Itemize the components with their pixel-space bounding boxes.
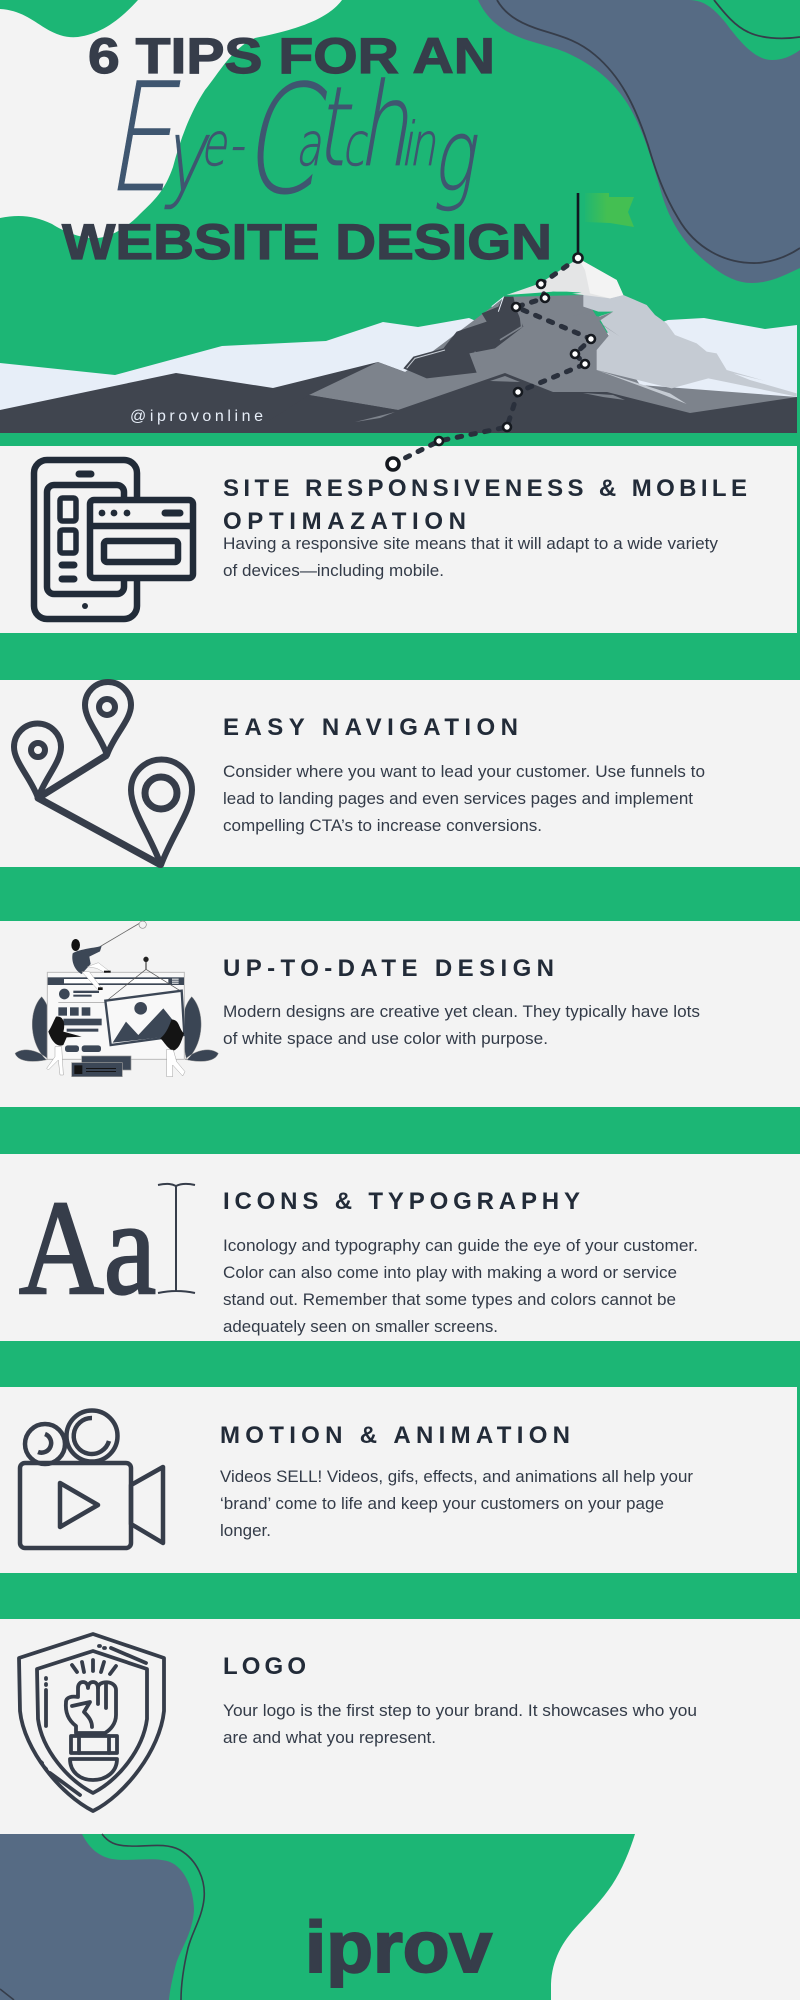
heading: UP-TO-DATE DESIGN — [223, 955, 554, 982]
body text: Modern designs are creative yet clean. They typically have lots — [223, 1003, 700, 1021]
footer logo: iprov — [305, 1908, 492, 1988]
heading: LOGO — [223, 1653, 306, 1680]
script title: e — [200, 111, 228, 180]
peak faces — [403, 258, 797, 404]
script title: i — [400, 111, 415, 180]
light right face — [583, 295, 797, 397]
person right — [160, 1019, 184, 1051]
header decorative line: top right corner — [714, 0, 800, 38]
crack lines on light face — [572, 310, 620, 352]
heading: ICONS & TYPOGRAPHY — [223, 1188, 580, 1215]
script title: n — [409, 111, 436, 180]
left face highlights — [407, 350, 445, 368]
lower snow streaks — [597, 370, 687, 404]
snow cap — [507, 258, 623, 298]
body text: of white space and use color with purpose. — [223, 1030, 548, 1048]
icon: web design illustration — [15, 921, 218, 1077]
trail: dashed path up the mountain — [387, 254, 595, 470]
footer: slate blob — [0, 1834, 194, 2000]
icon: summit flag — [578, 193, 634, 258]
front ridge glints — [355, 376, 625, 422]
body text: Color can also come into play with making a word or service — [223, 1264, 677, 1282]
heading: OPTIMAZATION — [223, 508, 466, 535]
cards — [82, 1056, 131, 1070]
icon: shield with fist — [19, 1634, 164, 1811]
snow cap highlight — [578, 258, 623, 298]
heading: MOTION & ANIMATION — [220, 1422, 570, 1449]
hook and ropes — [143, 957, 149, 962]
body text — [220, 1468, 694, 1540]
script title: y — [162, 98, 210, 214]
heading: SITE RESPONSIVENESS & MOBILE — [223, 475, 747, 502]
icon: responsive devices — [34, 460, 193, 619]
script title: g — [431, 98, 477, 214]
picture frame — [105, 991, 184, 1045]
title line 2: WEBSITE DESIGN — [62, 214, 552, 270]
body text: of devices—including mobile. — [223, 562, 444, 580]
panel: logo — [0, 1619, 800, 1834]
far snowy range — [0, 318, 797, 433]
body text: lead to landing pages and even services pages and implement — [223, 790, 693, 808]
leaves right — [182, 997, 218, 1061]
footer: light blob — [551, 1834, 800, 2000]
green glint — [552, 292, 582, 295]
body text: Your logo is the first step to your brand. It showcases who you — [223, 1702, 697, 1720]
body text — [223, 763, 705, 835]
mountain scene — [0, 258, 797, 433]
heading: EASY NAVIGATION — [223, 714, 518, 741]
body text: longer. — [220, 1522, 271, 1540]
icon: typography Aa with text cursor: Aa — [19, 1174, 156, 1323]
front dark ridge — [250, 373, 797, 433]
body text — [223, 1003, 700, 1048]
social handle: @iprovonline — [130, 408, 263, 425]
heading — [223, 475, 747, 535]
script title: h — [357, 60, 409, 193]
script title: t — [315, 64, 352, 192]
icon: video camera — [20, 1410, 163, 1548]
script title: E — [105, 51, 180, 226]
body text: compelling CTA’s to increase conversions. — [223, 817, 542, 835]
panel: motion and animation — [0, 1387, 797, 1573]
body text: ‘brand’ come to life and keep your customers on your page — [220, 1495, 664, 1513]
leaves left — [15, 997, 51, 1061]
body text: Iconology and typography can guide the eye of your customer. — [223, 1237, 698, 1255]
panel: up-to-date design — [0, 921, 800, 1107]
back dark ridge — [0, 362, 500, 433]
body text: Videos SELL! Videos, gifs, effects, and animations all help your — [220, 1468, 694, 1486]
body text: Having a responsive site means that it will adapt to a wide variety — [223, 535, 719, 553]
person on top — [72, 946, 102, 974]
dark left face — [403, 297, 523, 378]
panel: icons and typography — [0, 1154, 800, 1341]
rope and hook — [100, 923, 139, 947]
body text: are and what you represent. — [223, 1729, 436, 1747]
body text — [223, 1702, 697, 1747]
panel: easy navigation — [0, 680, 800, 867]
footer: decorative line — [0, 1834, 204, 2000]
body text — [223, 535, 719, 580]
body text: Consider where you want to lead your customer. Use funnels to — [223, 763, 705, 781]
script title: - — [228, 111, 244, 180]
body text: stand out. Remember that some types and colors cannot be — [223, 1291, 676, 1309]
header decorative line: slate blob outline — [497, 0, 800, 263]
body text: adequately seen on smaller screens. — [223, 1318, 498, 1336]
header background: slate blob — [478, 0, 800, 283]
icon: map pins — [14, 682, 192, 865]
panel: site responsiveness — [0, 446, 797, 633]
script title: C — [241, 53, 327, 228]
header background: light blob — [0, 0, 342, 238]
script title: c — [342, 111, 368, 180]
body text — [223, 1237, 698, 1336]
mid grey ridge and peak body — [309, 295, 797, 433]
title line 1: 6 TIPS FOR AN — [88, 28, 495, 84]
person left — [48, 1017, 82, 1046]
browser window — [47, 972, 184, 1059]
script title: a — [295, 111, 321, 180]
